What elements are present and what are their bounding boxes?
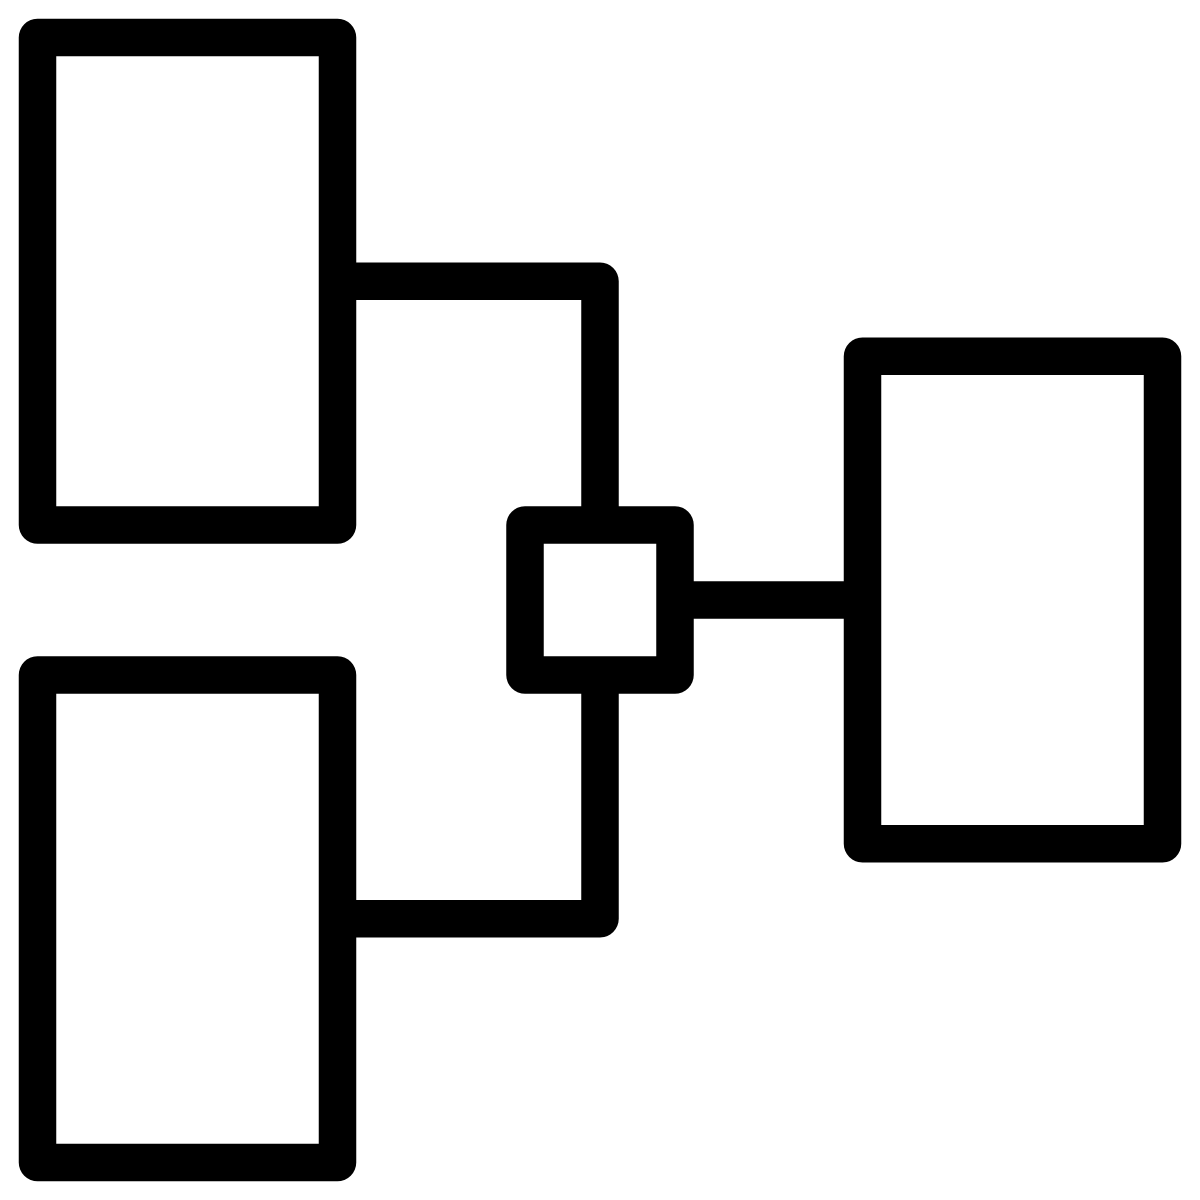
connector: bottom left box to center box: [338, 675, 600, 919]
connector: top left box to center box: [338, 281, 600, 525]
box: center: [525, 525, 675, 675]
connector: center box to right box: [675, 581, 862, 619]
box: top left: [38, 38, 338, 525]
box: bottom left: [38, 675, 338, 1162]
box: right: [862, 356, 1162, 844]
